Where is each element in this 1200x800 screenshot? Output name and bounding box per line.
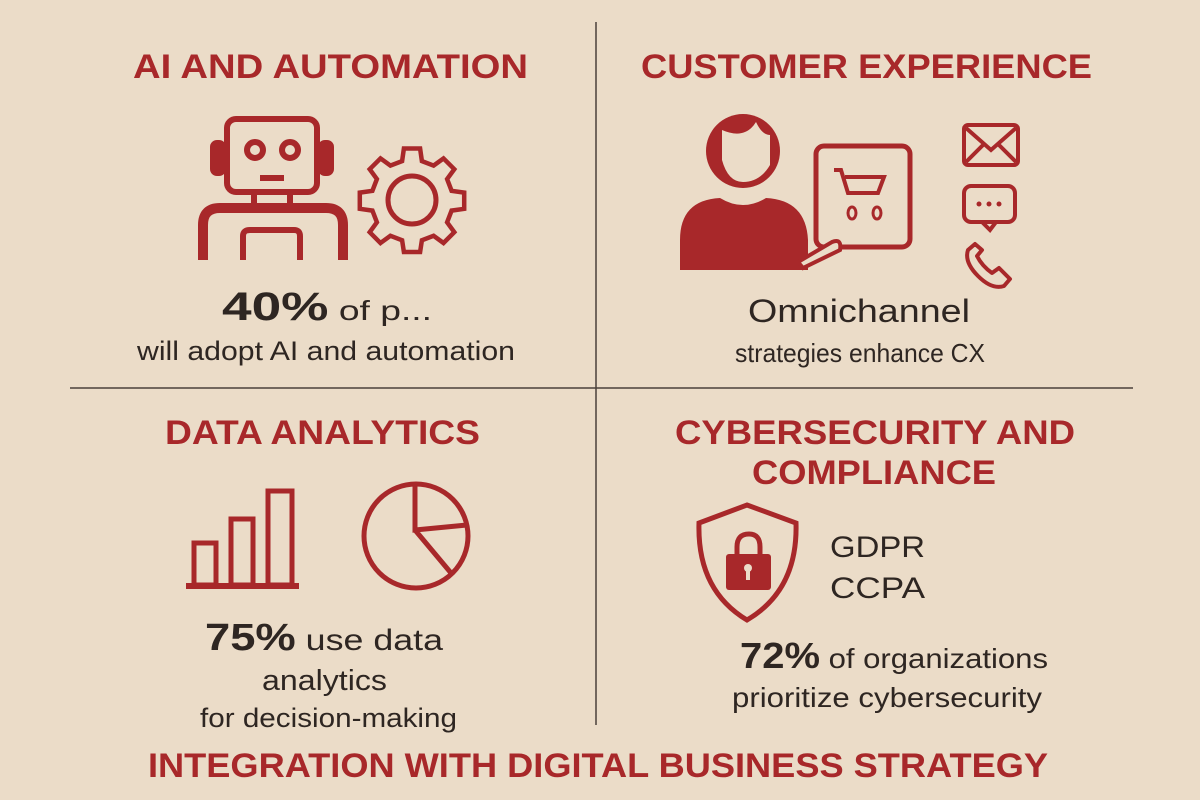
icon: chat bubble xyxy=(964,186,1015,230)
stat text: 75% use data xyxy=(205,617,443,659)
panel: data analytics: analytics xyxy=(262,665,387,697)
icon: person with tablet xyxy=(680,114,910,270)
text: GDPR CCPA: CCPA xyxy=(830,572,925,605)
panel: cybersecurity and compliance xyxy=(675,414,1075,713)
icon: bar chart xyxy=(186,491,299,586)
icon: robot xyxy=(203,119,343,260)
panel: AI and automation xyxy=(133,48,528,366)
heading: customer experience: CUSTOMER EXPERIENCE xyxy=(641,48,1092,86)
stat text: 40% of p... xyxy=(222,285,432,329)
text: GDPR CCPA: GDPR xyxy=(830,531,925,564)
heading: AI and automation: AI AND AUTOMATION xyxy=(133,48,528,86)
panel: customer experience xyxy=(641,48,1092,368)
icon: pie chart xyxy=(364,484,468,588)
icon: shield with lock xyxy=(699,505,796,620)
panel: cybersecurity and compliance: prioritize cybersecurity xyxy=(732,682,1042,713)
heading: data analytics: DATA ANALYTICS xyxy=(165,414,480,452)
icon: gear xyxy=(360,148,464,252)
panel: AI and automation: will adopt AI and automation xyxy=(136,336,515,366)
panel: data analytics: for decision-making xyxy=(200,703,457,733)
icon: envelope xyxy=(964,125,1018,165)
stat text: 72% of organizations xyxy=(740,635,1048,676)
text: omnichannel: Omnichannel xyxy=(748,293,970,329)
panel: customer experience: strategies enhance CX xyxy=(735,338,985,368)
footer heading: INTEGRATION WITH DIGITAL BUSINESS STRATEGY xyxy=(148,747,1048,785)
heading: cybersecurity: CYBERSECURITY AND xyxy=(675,414,1075,452)
panel: cybersecurity and compliance: COMPLIANCE xyxy=(752,454,996,492)
icon: phone xyxy=(967,244,1010,287)
panel: data analytics xyxy=(165,414,480,733)
text: GDPR CCPA xyxy=(830,531,925,605)
